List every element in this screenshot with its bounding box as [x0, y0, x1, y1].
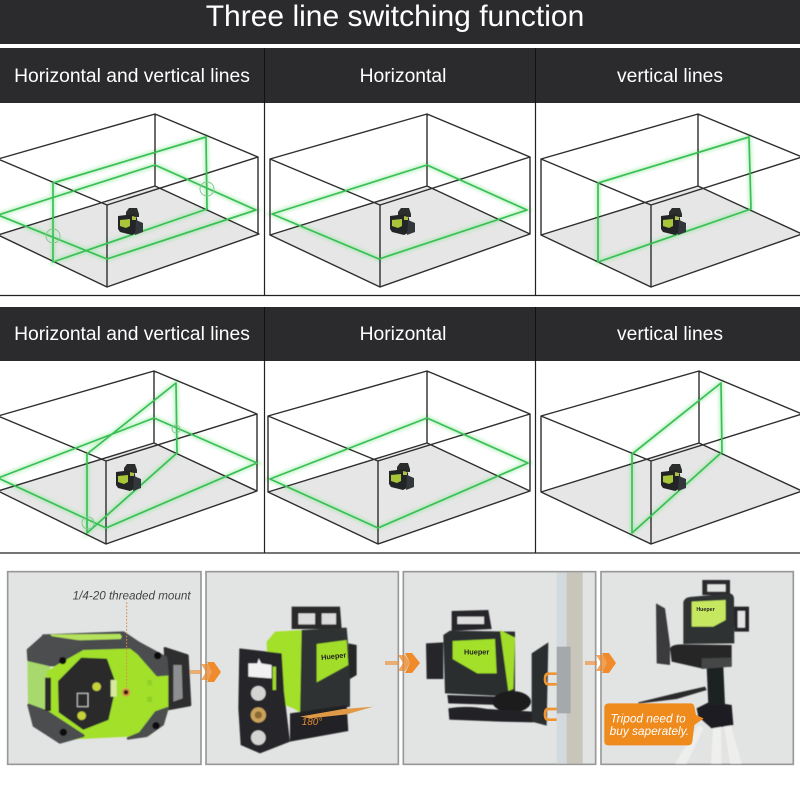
photo panel: wall mounting — [403, 572, 596, 764]
grid dividers — [0, 103, 800, 553]
header row 1 — [0, 48, 800, 103]
callout: tripod note: buy saperately. — [610, 724, 689, 738]
header row 2: vertical lines — [617, 324, 723, 345]
photo panel: magnetic bracket — [206, 572, 398, 764]
header row 2 — [0, 307, 800, 361]
arrow: step 3 to 4 — [585, 653, 616, 673]
brand label: Hueper — [696, 607, 715, 613]
wall column — [557, 573, 583, 764]
arrow: step 2 to 3 — [385, 653, 420, 673]
angle label: 180° — [302, 717, 322, 728]
header row 1: vertical lines — [617, 66, 723, 87]
panel: row 1 horizontal line — [270, 114, 530, 287]
icon: laser underside view — [27, 633, 190, 742]
callout: tripod note — [604, 703, 704, 745]
panel: row 1 vertical lines — [541, 114, 800, 287]
photo panel: threaded mount — [8, 572, 201, 764]
magnet markers — [545, 674, 557, 720]
panel: row 1 horizontal and vertical lines — [0, 114, 259, 287]
header row 2: Horizontal and vertical lines — [14, 324, 250, 345]
panel: row 2 vertical lines — [541, 371, 800, 544]
panel: row 2 horizontal and vertical lines — [0, 371, 257, 544]
icon: laser on wall bracket — [426, 610, 548, 726]
header row 1: Horizontal — [360, 66, 446, 87]
icon: laser on tripod — [638, 580, 749, 764]
icon: laser with bracket — [238, 607, 357, 753]
header row 2: Horizontal — [360, 324, 446, 345]
panel: row 2 horizontal line — [268, 371, 530, 544]
photo panel: tripod mounting — [601, 572, 793, 764]
mount label: 1/4-20 threaded mount — [73, 589, 191, 602]
callout: tripod note: Tripod need to — [610, 711, 686, 725]
brand label: Hueper — [321, 650, 347, 662]
arrow: step 1 to 2 — [190, 662, 221, 682]
brand label: Hueper — [464, 647, 489, 656]
title bar — [0, 0, 800, 44]
header row 1: Horizontal and vertical lines — [14, 66, 250, 87]
title: Three line switching function — [206, 0, 584, 33]
